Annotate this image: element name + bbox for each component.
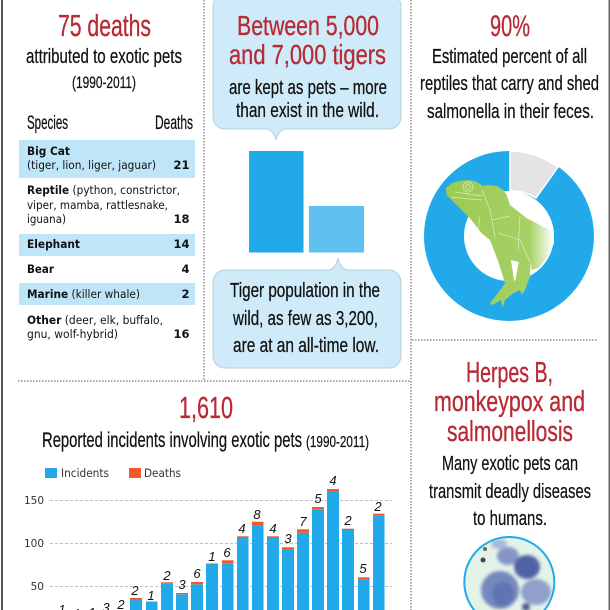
bar chart: incidents and deaths by year: 8 [253, 507, 261, 522]
callout: tigers kept as pets: and 7,000 tigers [229, 39, 386, 70]
callout: tigers kept as pets: Between 5,000 [237, 10, 379, 41]
legend: Incidents [61, 466, 109, 480]
panel: deaths table [19, 8, 195, 341]
row: reptile: 18 [173, 212, 190, 226]
row: marine [19, 283, 195, 305]
legend [45, 466, 181, 480]
table header: Species [27, 113, 68, 134]
bar chart: incidents and deaths by year: 6 [193, 566, 201, 581]
text block: disease transmission: to humans. [473, 508, 547, 530]
bar chart: incidents and deaths by year: 3 [178, 577, 186, 592]
subheading: attributed to exotic pets: attributed to exotic pets [26, 46, 182, 68]
bar chart: incidents and deaths by year: 2 [373, 499, 382, 514]
row: bear: Bear [27, 262, 54, 276]
bar chart: incidents and deaths by year: 100 [24, 538, 44, 550]
bar chart: incidents and deaths by year: 2 [343, 513, 352, 528]
bar chart: incidents and deaths by year: 5 [314, 491, 322, 506]
row: other: Other (deer, elk, buffalo, [27, 313, 163, 327]
bar chart: incidents and deaths by year: 3 [284, 531, 292, 546]
bar chart: incidents and deaths by year: 1 [208, 549, 216, 564]
callout: tiger population in the wild: wild, as few as 3,200, [232, 308, 378, 330]
row: other [27, 313, 190, 341]
bar chart: incidents and deaths by year: 2 [130, 583, 139, 598]
bar chart: incidents and deaths by year: 5 [359, 561, 367, 576]
row: other: gnu, wolf-hybrid) [27, 327, 118, 341]
donut chart: 90 percent [444, 151, 574, 301]
heading: herpes B, monkeypox and salmonellosis: Herpes B, [466, 357, 553, 389]
row: marine: Marine (killer whale) [27, 287, 140, 301]
bar chart: incidents and deaths by year: 4 [238, 521, 246, 536]
bar chart: incidents and deaths by year: 1 [147, 588, 155, 603]
row: marine: 2 [181, 287, 190, 301]
text block: reptile salmonella [420, 46, 599, 123]
row: reptile [27, 183, 190, 226]
bar chart: incidents and deaths by year: 6 [223, 545, 231, 560]
bar chart: incidents and deaths by year: 4 [269, 521, 277, 536]
bar chart: incidents and deaths by year: 150 [24, 495, 44, 507]
callout: tiger population in the wild [213, 258, 401, 368]
row: elephant [19, 234, 195, 256]
subheading: reported incidents: (1990-2011) [306, 434, 369, 451]
text block: disease transmission [429, 453, 591, 530]
legend: Deaths [144, 466, 181, 480]
row: elephant: 14 [173, 237, 190, 251]
panel: incidents chart [24, 390, 392, 610]
callout: tigers kept as pets: are kept as pets – more [229, 77, 387, 99]
table header [27, 113, 193, 134]
heading: 90%: 90% [490, 10, 530, 43]
subheading: reported incidents: Reported incidents involving exotic pets [42, 429, 302, 452]
heading: 75 deaths: 75 deaths [58, 8, 151, 43]
bar chart: incidents and deaths by year: 4 [329, 473, 337, 488]
table header: Deaths [155, 113, 193, 134]
row: big cat: Big Cat [27, 144, 70, 158]
panel: tigers [213, 0, 401, 368]
row: elephant: Elephant [27, 237, 80, 251]
row: big cat: 21 [173, 158, 190, 172]
row: bear: 4 [181, 262, 190, 276]
row: bear [27, 262, 190, 276]
callout: tiger population in the wild: Tiger population in the [230, 280, 380, 302]
bar chart: incidents and deaths by year: 7 [299, 514, 307, 529]
bar chart: incidents and deaths by year: 2 [162, 568, 171, 583]
icon: iguana [446, 180, 554, 307]
row: big cat [19, 140, 195, 178]
row: other: 16 [173, 327, 190, 341]
panel: reptiles salmonella [420, 10, 599, 307]
heading: 1,610: 1,610 [179, 390, 233, 425]
row: reptile: iguana) [27, 212, 66, 226]
row: big cat: (tiger, lion, liger, jaguar) [27, 158, 156, 172]
callout: tigers kept as pets [213, 0, 401, 140]
row: reptile: Reptile (python, constrictor, [27, 183, 180, 197]
bar chart: incidents and deaths by year [24, 473, 392, 610]
bar chart: incidents and deaths by year: 50 [31, 581, 44, 593]
heading: herpes B, monkeypox and salmonellosis [434, 357, 585, 448]
row: reptile: viper, mamba, rattlesnake, [27, 198, 168, 212]
bar: tigers as pets [249, 151, 304, 252]
callout: tigers kept as pets: than exist in the wild. [236, 100, 379, 122]
date range: (1990-2011) [72, 73, 136, 92]
bar: tigers in the wild [309, 206, 364, 252]
callout: tiger population in the wild: are at an all-time low. [233, 335, 379, 357]
icon: microscope cell image [464, 537, 554, 610]
panel: diseases [429, 357, 591, 610]
